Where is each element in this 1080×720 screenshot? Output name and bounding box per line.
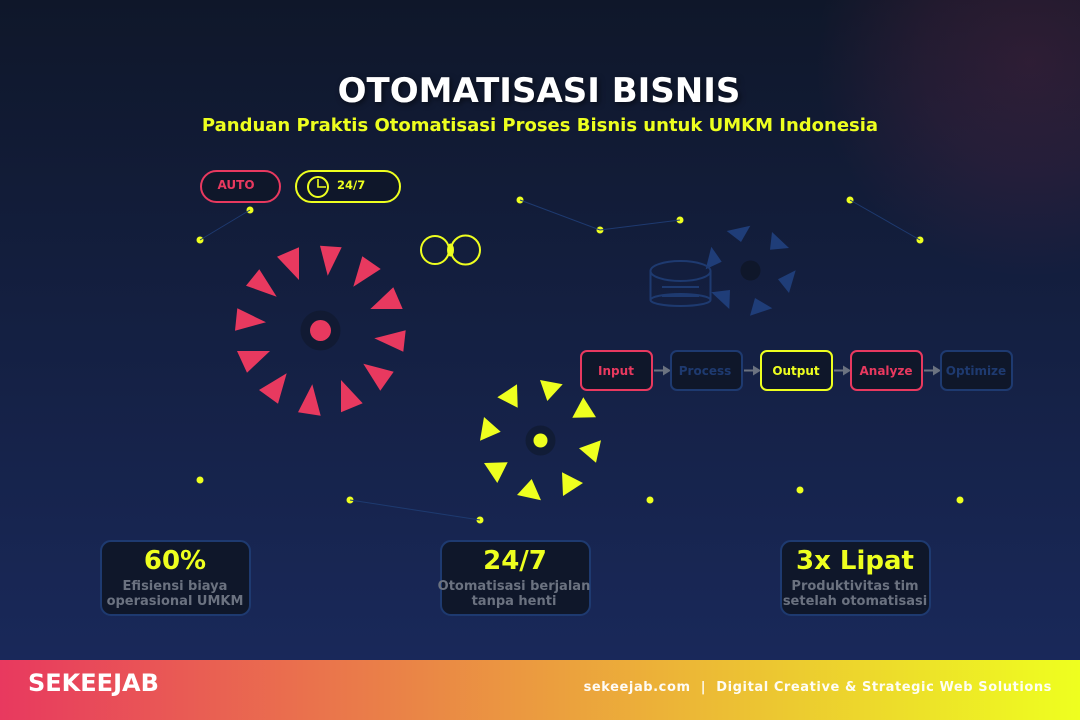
brand name: SEKEEJAB [28,669,159,697]
stat card: 60% [101,541,250,615]
stat card: 60%: 60% [144,546,206,576]
stat card: 3x Lipat: 3x Lipat [796,546,914,576]
flow step: Process: Process [679,364,731,378]
flow step: Input [581,351,652,390]
icon: medium yellow gear [480,380,601,500]
footer tagline: sekeejab.com | Digital Creative & Strategic Web Solutions [584,680,1052,695]
icon: large red gear [235,246,406,416]
badge: 24/7 with clock icon: 24/7 [337,178,365,192]
flow step: Optimize: Optimize [946,364,1006,378]
arrow: Process to Output [744,366,761,376]
flow step: Optimize [941,351,1012,390]
flow step: Analyze: Analyze [860,364,912,378]
stat card: 24/7: tanpa henti [472,594,556,609]
footer bar [0,660,1080,720]
icon: small blue gear [706,226,796,316]
flow step: Output [761,351,832,390]
title: OTOMATISASI BISNIS [338,71,740,111]
arrow: Output to Analyze [834,366,851,376]
network dots and lines [196,196,964,524]
stat card: 24/7: Otomatisasi berjalan [438,579,590,594]
flow step: Output: Output [772,364,820,378]
stat card: 3x Lipat: setelah otomatisasi [783,594,927,609]
flow diagram [581,351,1012,390]
arrow: Analyze to Optimize [924,366,941,376]
stat card: 24/7: 24/7 [483,546,547,576]
badge: 24/7 with clock icon [296,171,400,202]
subtitle: Panduan Praktis Otomatisasi Proses Bisnis untuk UMKM Indonesia [202,115,878,136]
flow step: Analyze [851,351,922,390]
stat card: 3x Lipat: Produktivitas tim [791,579,919,594]
flow step: Process [671,351,742,390]
flow step: Input: Input [598,364,634,378]
arrow: Input to Process [654,366,671,376]
stat card: 60%: operasional UMKM [107,594,243,609]
icon: linked circles [421,236,480,264]
stat card: 24/7 [438,541,590,615]
badge: AUTO: AUTO [217,178,255,192]
icon: database cylinder [650,261,710,306]
badge: AUTO [201,171,280,202]
stat card: 60%: Efisiensi biaya [123,579,227,594]
stat card: 3x Lipat [781,541,930,615]
